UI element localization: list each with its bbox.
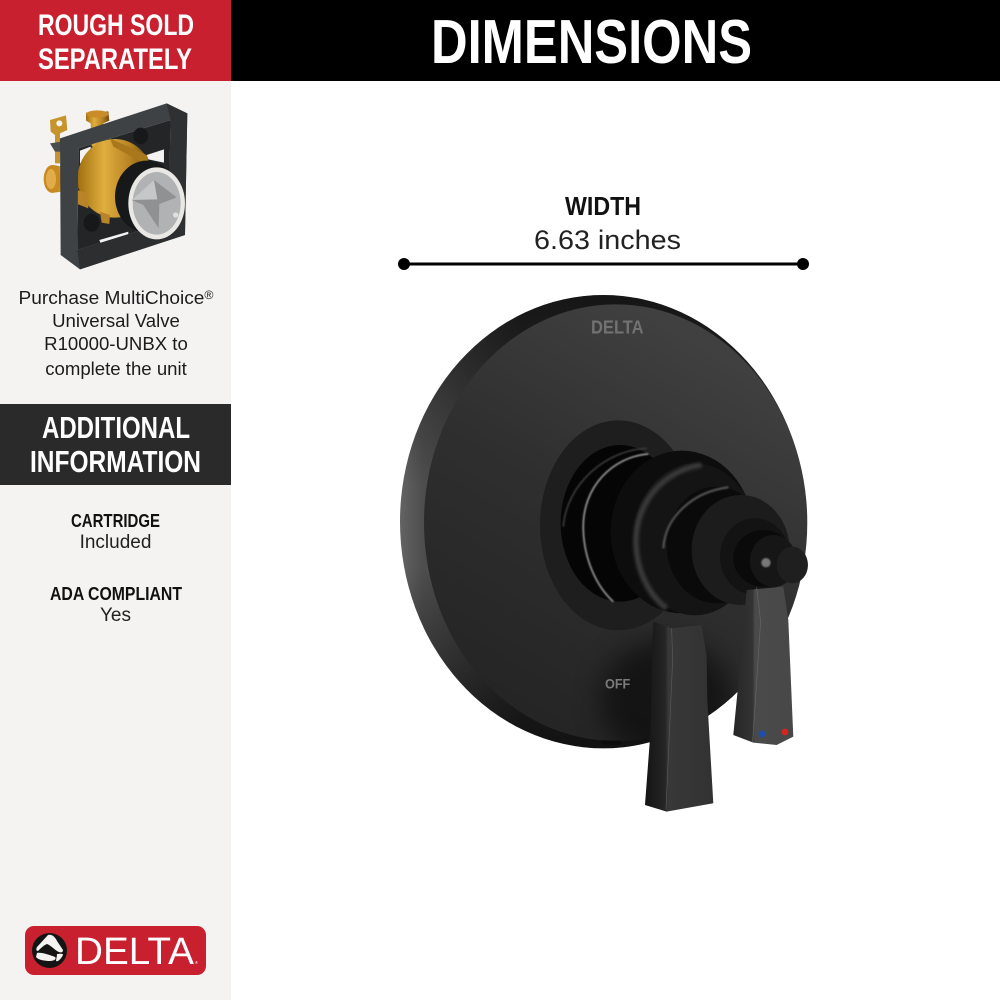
icon: dark plastic mounting frame xyxy=(60,103,187,269)
icon: screws xyxy=(84,128,148,232)
banner: additional information: ADDITIONAL xyxy=(42,410,190,445)
logo: Delta xyxy=(25,926,206,975)
banner: rough sold separately xyxy=(0,0,231,81)
banner: additional information: INFORMATION xyxy=(30,444,201,479)
plate face xyxy=(424,304,807,741)
text: cartridge info: CARTRIDGE xyxy=(71,511,160,531)
icon: rough-in valve product xyxy=(44,103,187,269)
heading: width label: WIDTH xyxy=(565,191,641,221)
text: DELTA mark on plate: DELTA xyxy=(591,316,644,337)
banner: dimensions title xyxy=(231,0,1000,81)
escutcheon hub xyxy=(540,420,697,630)
text: purchase note xyxy=(18,287,214,379)
text: width value: 6.63 inches xyxy=(534,225,681,255)
handle: right lever xyxy=(733,587,793,745)
icon: brass fittings xyxy=(44,110,152,224)
panel: left sidebar xyxy=(0,0,231,1000)
text: ADA compliance info: ADA COMPLIANT xyxy=(50,584,182,604)
banner: dimensions title: DIMENSIONS xyxy=(431,8,752,77)
handle: left lever xyxy=(645,622,713,812)
plate rim xyxy=(400,295,807,748)
text: ADA compliance info: Yes xyxy=(100,605,131,626)
red dot xyxy=(782,729,788,735)
text: OFF mark on plate: OFF xyxy=(605,676,631,692)
icon: frame back wall with windows xyxy=(77,120,171,250)
blue dot xyxy=(759,731,765,737)
knob xyxy=(750,535,808,587)
logo: Delta: DELTA xyxy=(75,931,195,973)
banner: rough sold separately: SEPARATELY xyxy=(38,43,192,76)
banner: additional information xyxy=(0,404,231,485)
bonnet rings xyxy=(561,445,793,615)
logo: Delta: ® xyxy=(195,960,198,965)
product: shower valve trim xyxy=(400,295,808,812)
text: purchase note: R10000-UNBX to xyxy=(44,333,188,354)
text: purchase note: Universal Valve xyxy=(52,310,180,331)
icon: cartridge body xyxy=(115,161,178,233)
text: ADA compliance info xyxy=(50,584,182,626)
text: cartridge info xyxy=(71,511,160,553)
text: purchase note: complete the unit xyxy=(45,358,188,379)
banner: rough sold separately: ROUGH SOLD xyxy=(38,9,194,42)
plate shadow under handle xyxy=(598,638,736,740)
text: purchase note: Purchase MultiChoice xyxy=(18,287,199,308)
text: purchase note: ® xyxy=(204,288,214,302)
icon: cartridge face xyxy=(128,167,185,239)
text: cartridge info: Included xyxy=(80,532,151,553)
notch at plate bottom xyxy=(602,741,622,745)
arrow: width dimension line xyxy=(398,258,809,270)
